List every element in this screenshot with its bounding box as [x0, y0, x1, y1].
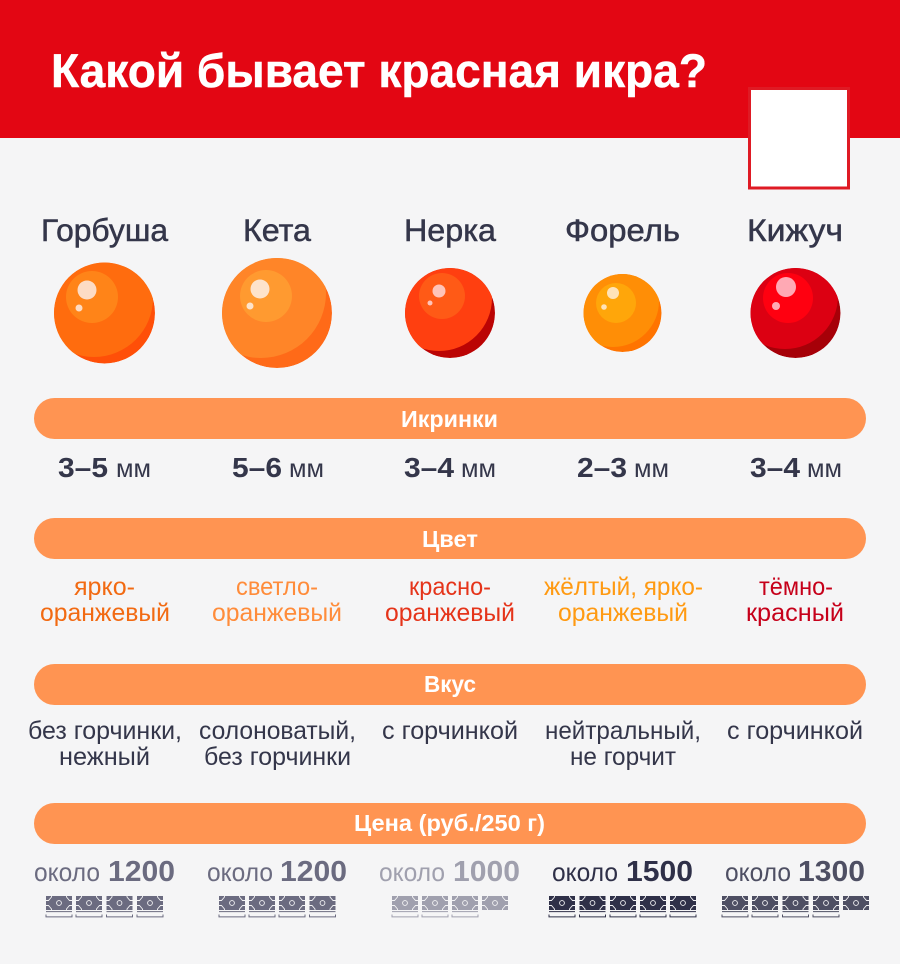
colour descriptions row: оранжевый: [40, 599, 170, 627]
price: Gorbusha: 1200: [108, 856, 175, 888]
price: Keta: 1200: [280, 856, 347, 888]
colour descriptions row: красный: [746, 599, 844, 627]
taste descriptions row: нежный: [59, 743, 150, 771]
taste descriptions row: без горчинки,: [28, 717, 182, 745]
egg sizes row: [58, 452, 842, 483]
egg sizes row: 3–4: [404, 452, 454, 483]
icon: roe egg Nerka: [405, 268, 495, 358]
price: Gorbusha: около: [34, 857, 100, 887]
price: Forel: [549, 856, 696, 917]
section bar: Икринки: Икринки: [401, 406, 498, 432]
egg sizes row: мм: [461, 453, 496, 483]
egg sizes row: мм: [116, 453, 151, 483]
icon: roe egg Keta: [222, 258, 332, 368]
colour descriptions row: [40, 573, 844, 627]
taste descriptions row: с горчинкой: [382, 717, 518, 745]
price: Keta: [207, 856, 347, 917]
taste descriptions row: [28, 717, 863, 771]
taste descriptions row: солоноватый,: [199, 717, 356, 745]
price: Kizhuch: [722, 856, 869, 917]
taste descriptions row: с горчинкой: [727, 717, 863, 745]
column: species names: Кижуч: [747, 212, 843, 248]
colour descriptions row: красно-: [409, 573, 491, 601]
egg sizes row: 3–5: [58, 452, 108, 483]
taste descriptions row: без горчинки: [204, 743, 351, 771]
colour descriptions row: оранжевый: [558, 599, 688, 627]
price: Gorbusha: [34, 856, 175, 917]
icon: roe egg Kizhuch: [750, 268, 840, 358]
section bar: Цвет: [34, 518, 866, 559]
egg sizes row: мм: [807, 453, 842, 483]
egg sizes row: мм: [289, 453, 324, 483]
taste descriptions row: нейтральный,: [545, 717, 701, 745]
column: species names: Кета: [243, 212, 311, 248]
header band: [0, 0, 900, 138]
price: Keta: около: [207, 857, 273, 887]
column: species names: Нерка: [404, 212, 496, 248]
price: Forel: около: [552, 857, 618, 887]
section bar: Вкус: [34, 664, 866, 705]
taste descriptions row: не горчит: [570, 743, 677, 771]
egg sizes row: 2–3: [577, 452, 627, 483]
section bar: Цвет: Цвет: [422, 526, 478, 552]
section bar: Цена: Цена (руб./250 г): [354, 810, 545, 836]
price: Nerka: [379, 856, 520, 917]
colour descriptions row: тёмно-: [759, 573, 833, 601]
column: species names: Форель: [565, 212, 680, 248]
colour descriptions row: ярко-: [74, 573, 135, 601]
column: species names: [41, 212, 843, 248]
egg sizes row: мм: [634, 453, 669, 483]
price: Kizhuch: 1300: [798, 856, 865, 888]
colour descriptions row: жёлтый, ярко-: [544, 573, 703, 601]
icon: roe egg Gorbusha: [54, 262, 155, 364]
section bar: Цена: [34, 803, 866, 844]
column: species names: Горбуша: [41, 212, 168, 248]
icon: roe egg Forel: [584, 274, 662, 352]
colour descriptions row: светло-: [236, 573, 318, 601]
egg sizes row: 3–4: [750, 452, 800, 483]
section bar: Икринки: [34, 398, 866, 439]
price: Nerka: 1000: [453, 856, 520, 888]
title: Какой бывает красная икра?: [51, 44, 707, 97]
price: Kizhuch: около: [725, 857, 791, 887]
white logo placeholder box: [750, 88, 848, 188]
colour descriptions row: оранжевый: [385, 599, 515, 627]
egg sizes row: 5–6: [232, 452, 282, 483]
colour descriptions row: оранжевый: [212, 599, 342, 627]
price: Forel: 1500: [626, 856, 693, 888]
price: Nerka: около: [379, 857, 445, 887]
section bar: Вкус: Вкус: [424, 671, 476, 697]
